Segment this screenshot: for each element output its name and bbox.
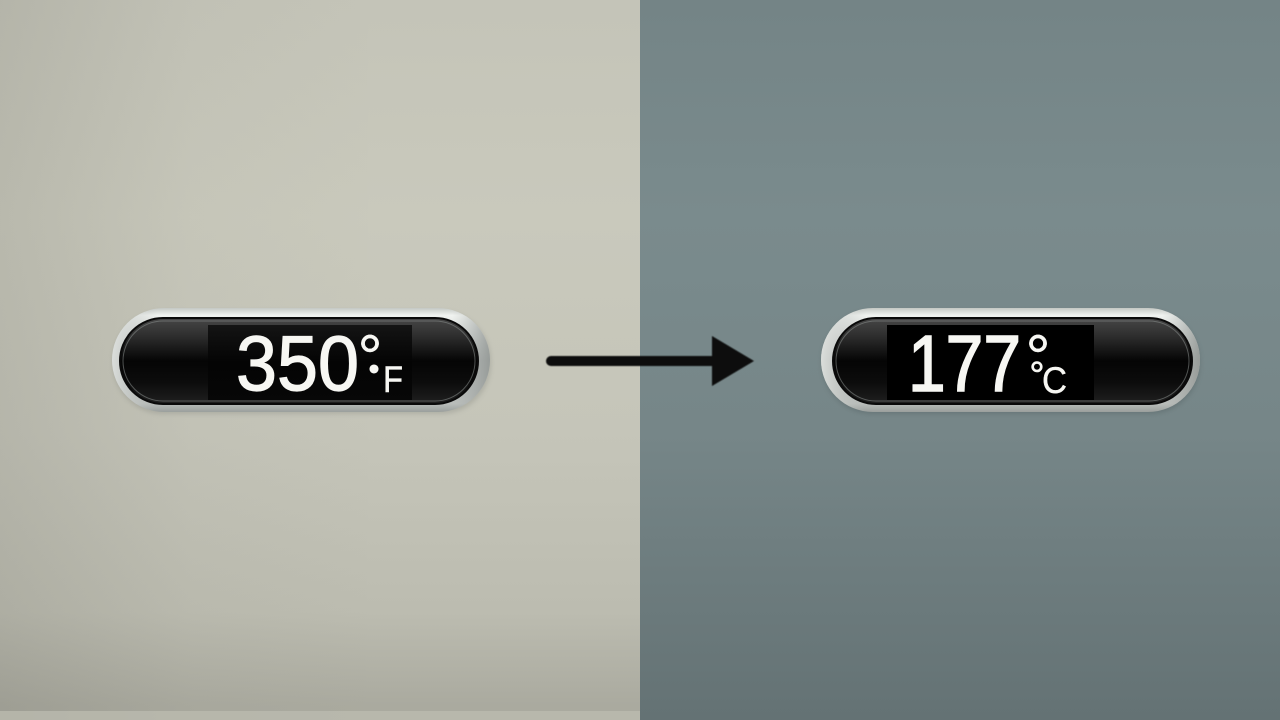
unit dot: • [369,353,379,386]
temperature value: 350: 350 [236,319,359,407]
unit: F: F [383,359,403,400]
degree sign: ° [358,323,382,392]
Celsius display [821,308,1200,414]
display window [208,325,412,400]
small degree sign: ° [1029,355,1045,397]
degree sign: ° [1026,323,1050,392]
panel: Fahrenheit background [0,0,640,720]
unit: C: C [1042,360,1067,401]
display window [887,325,1094,400]
panel: Celsius background [640,0,1280,720]
arrow [546,336,754,386]
temperature value: 177: 177 [908,319,1021,408]
Fahrenheit display [112,308,491,414]
